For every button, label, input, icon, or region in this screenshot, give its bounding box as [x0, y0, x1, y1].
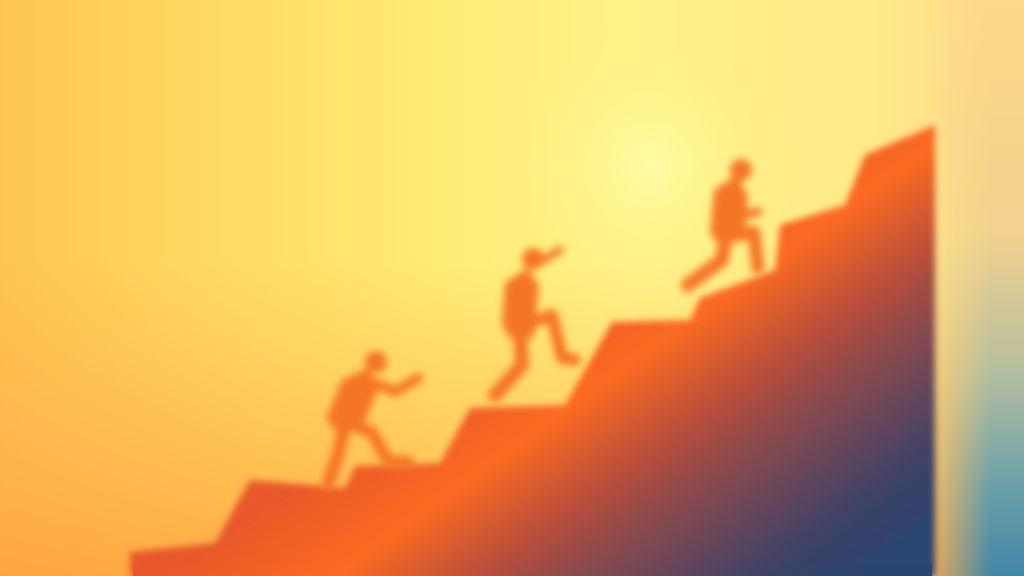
figure: lower climber: [326, 351, 418, 484]
staircase silhouette: [130, 125, 935, 576]
figure: upper climber: [688, 159, 758, 285]
figure: middle climber: [495, 248, 575, 395]
sun glow: [500, 15, 800, 315]
